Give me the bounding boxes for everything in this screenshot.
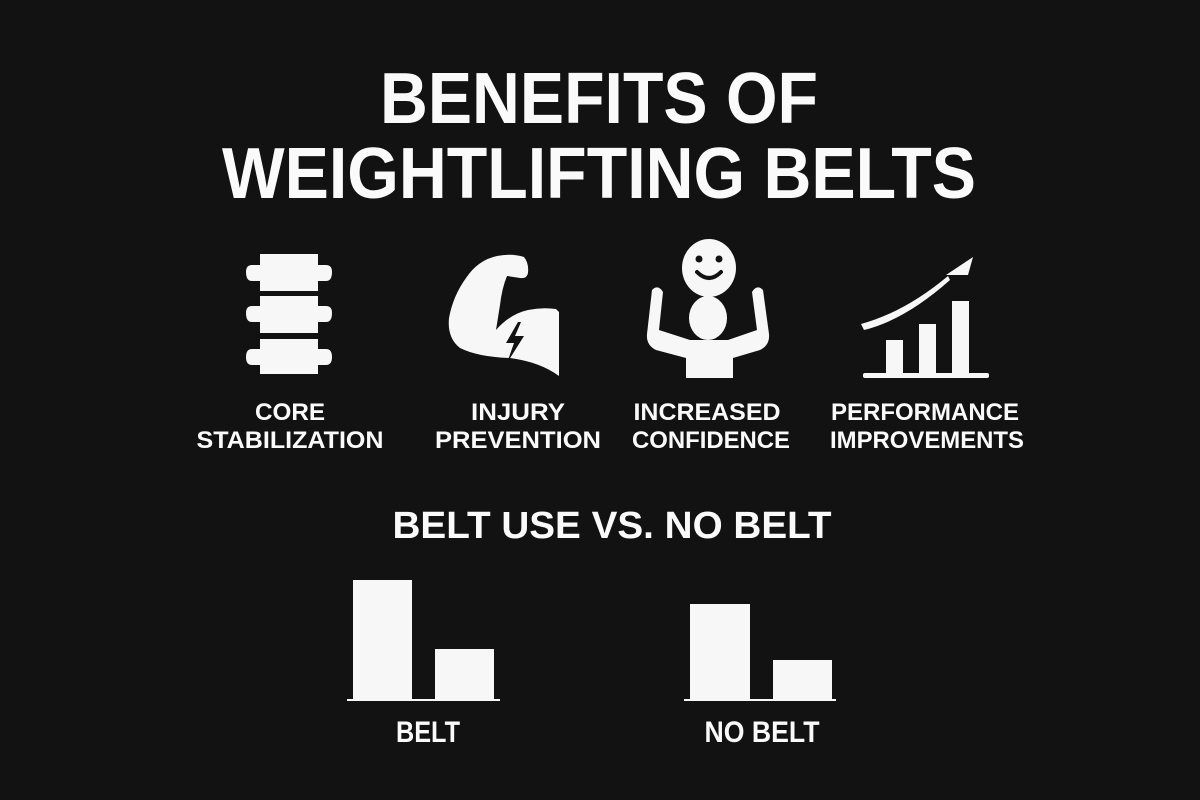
title: WEIGHTLIFTING BELTS: [222, 134, 976, 214]
chart: no belt: NO BELT: [704, 716, 820, 749]
icon: spine: [246, 254, 332, 374]
label: core stabilization: [196, 399, 384, 454]
title: BENEFITS OF: [380, 59, 818, 139]
label: core stabilization: CORE: [255, 399, 325, 426]
label: increased confidence: [632, 399, 790, 454]
heading: belt use vs no belt: BELT USE VS. NO BELT: [392, 505, 832, 547]
label: performance improvements: IMPROVEMENTS: [830, 427, 1024, 454]
label: injury prevention: PREVENTION: [435, 427, 601, 454]
label: injury prevention: [435, 399, 601, 454]
icon: confident person: [647, 239, 769, 378]
icon: flexed arm: [449, 255, 559, 376]
chart: no belt: [684, 604, 836, 749]
label: increased confidence: CONFIDENCE: [632, 427, 790, 454]
label: increased confidence: INCREASED: [634, 399, 780, 426]
title: [222, 59, 976, 214]
label: performance improvements: [830, 399, 1024, 454]
chart: belt: BELT: [396, 716, 460, 749]
chart: belt: [347, 580, 500, 749]
label: injury prevention: INJURY: [471, 399, 565, 426]
label: core stabilization: STABILIZATION: [196, 427, 384, 454]
icon: growth chart: [861, 257, 989, 378]
label: performance improvements: PERFORMANCE: [831, 399, 1019, 426]
